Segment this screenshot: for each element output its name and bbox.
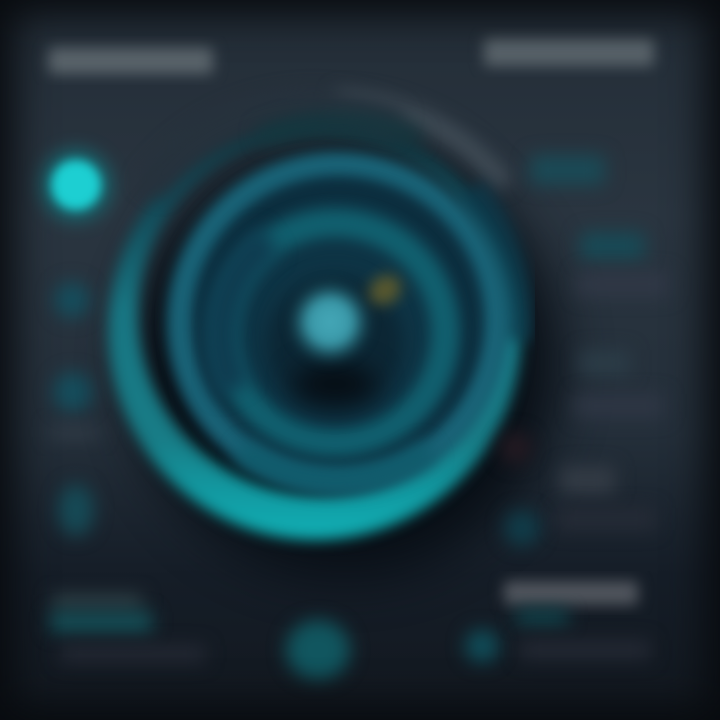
text: bottom left caption: [60, 645, 205, 663]
icon: bright teal dot: [40, 149, 112, 221]
third ring: [225, 223, 445, 443]
bottom row: [50, 581, 650, 680]
third ring left dimming: [221, 240, 270, 390]
dimming over upper ring: [150, 105, 400, 190]
label: right 3: [580, 350, 630, 376]
dark red accent: [500, 432, 532, 464]
icon: bottom center blob: [286, 620, 350, 680]
right column labels: [504, 155, 670, 546]
center glow: [286, 278, 374, 366]
icon: left dot 3: [53, 372, 93, 412]
heading: top right: [484, 38, 654, 66]
text: bottom right caption: [520, 640, 650, 660]
dark band above second ring: [260, 121, 420, 140]
label: bottom left teal: [50, 612, 152, 632]
inner dark well: [267, 277, 403, 413]
radial chart: [108, 100, 560, 577]
second ring: [180, 164, 496, 480]
dark shadow behind rings: [130, 147, 560, 577]
left column icons: [40, 149, 112, 536]
heading: top left: [48, 47, 213, 74]
text: left caption 3: [50, 425, 100, 439]
outer crescent ring: [108, 120, 522, 540]
icon: left dot 4: [58, 484, 94, 536]
dark shadow beneath center: [293, 364, 377, 404]
label: right 1: [530, 155, 605, 185]
pointer: olive needle: [363, 269, 407, 311]
text: right 2 caption: [578, 272, 670, 296]
disc fill: [170, 160, 500, 490]
right side ring dimming: [470, 190, 516, 340]
label: bottom left heading: [52, 594, 142, 610]
label: right 2: [580, 232, 645, 260]
grey outer arc: [335, 100, 505, 185]
text: right 3 caption: [575, 394, 665, 418]
icon: bottom right dot: [465, 629, 499, 663]
label: bottom right heading: [504, 581, 638, 605]
icon: left dot 2: [54, 282, 90, 318]
icon: right dot: [504, 510, 540, 546]
text: right 4 caption: [556, 508, 656, 530]
label: bottom right teal: [516, 610, 568, 624]
gap inside second ring: [206, 190, 470, 454]
label: right 4: [560, 466, 615, 494]
lower band between rings: [240, 450, 430, 480]
